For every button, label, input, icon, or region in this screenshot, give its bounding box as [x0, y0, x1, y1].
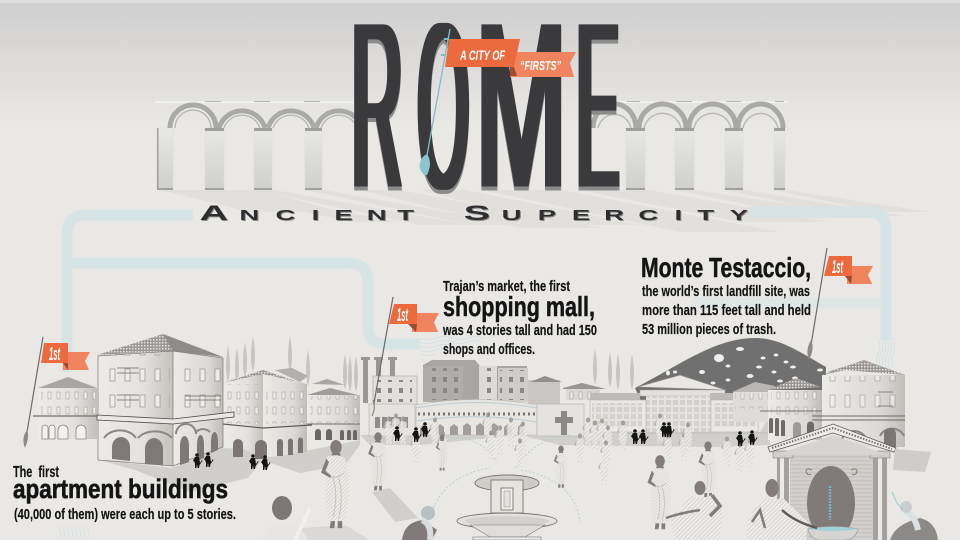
building: right apartment [223, 368, 312, 459]
text block: monte testaccio: Monte Testaccio, [641, 252, 811, 283]
text block: monte testaccio: more than 115 feet tall and held [642, 302, 811, 319]
fountain with dashed water arcs [432, 435, 580, 540]
subtitle: ancient supercity: Ancient Supercity [199, 201, 748, 225]
temple with colonnade [590, 375, 770, 434]
central buildings and columns: trajan's market [361, 357, 606, 436]
text block: shopping mall: shops and offices. [443, 341, 535, 358]
water ripples [59, 336, 894, 540]
javelin [420, 29, 450, 175]
text block: monte testaccio: the world’s first landfill site, was [642, 283, 810, 300]
flag: shopping mall: 1st [397, 305, 408, 325]
title ribbon: a city of firsts: “FIRSTS” [520, 58, 561, 73]
black silhouette figures [193, 422, 758, 470]
building: right large apartment [812, 360, 905, 447]
flag: monte testaccio [807, 248, 873, 360]
building: far right apartment group [305, 379, 360, 440]
text block: monte testaccio [641, 252, 811, 338]
text block: apartment buildings: apartment buildings [13, 474, 228, 504]
large toga figures [321, 432, 716, 529]
text block: shopping mall [442, 278, 597, 358]
title ribbon: a city of firsts [445, 39, 576, 77]
cloaked figure at fountain [747, 479, 817, 540]
flag: shopping mall [372, 297, 439, 416]
flag: monte testaccio: 1st [832, 257, 843, 277]
aqueduct: left arches [155, 102, 362, 190]
subtitle: ancient supercity: Ancient Supercity [200, 202, 749, 226]
text block: shopping mall: was 4 stories tall and had 150 [442, 322, 597, 339]
building: main apartment [97, 334, 234, 466]
flag: apartment buildings [23, 337, 90, 448]
monte testaccio hill [635, 338, 826, 420]
bust figure bottom left [262, 496, 310, 540]
crowd of small distant figures [383, 412, 754, 486]
aqueduct: right arches [593, 102, 788, 190]
text block: shopping mall: shopping mall, [443, 291, 595, 322]
title ribbon: a city of firsts: A CITY OF [459, 47, 505, 63]
building: small left apartment [33, 377, 97, 439]
seated figure in centre-right foreground [665, 481, 724, 540]
building: mid right apartments [732, 378, 822, 440]
distant cypress trees [226, 336, 634, 392]
text block: apartment buildings: The first [13, 464, 59, 481]
crouching drinker right [890, 492, 938, 540]
ground shadows [100, 415, 770, 540]
text block: monte testaccio: 53 million pieces of trash. [642, 321, 776, 338]
text block: apartment buildings [13, 464, 236, 523]
text block: apartment buildings: (40,000 of them) were each up to 5 stories. [14, 507, 236, 523]
flag: apartment buildings: 1st [49, 344, 60, 364]
aqueduct shadows [160, 190, 930, 232]
title: ROME [352, 0, 619, 241]
fountain shrine [768, 424, 931, 540]
aqueduct pipes [67, 212, 886, 372]
crouching drinker left [402, 506, 437, 540]
text block: shopping mall: Trajan’s market, the first [443, 278, 570, 295]
